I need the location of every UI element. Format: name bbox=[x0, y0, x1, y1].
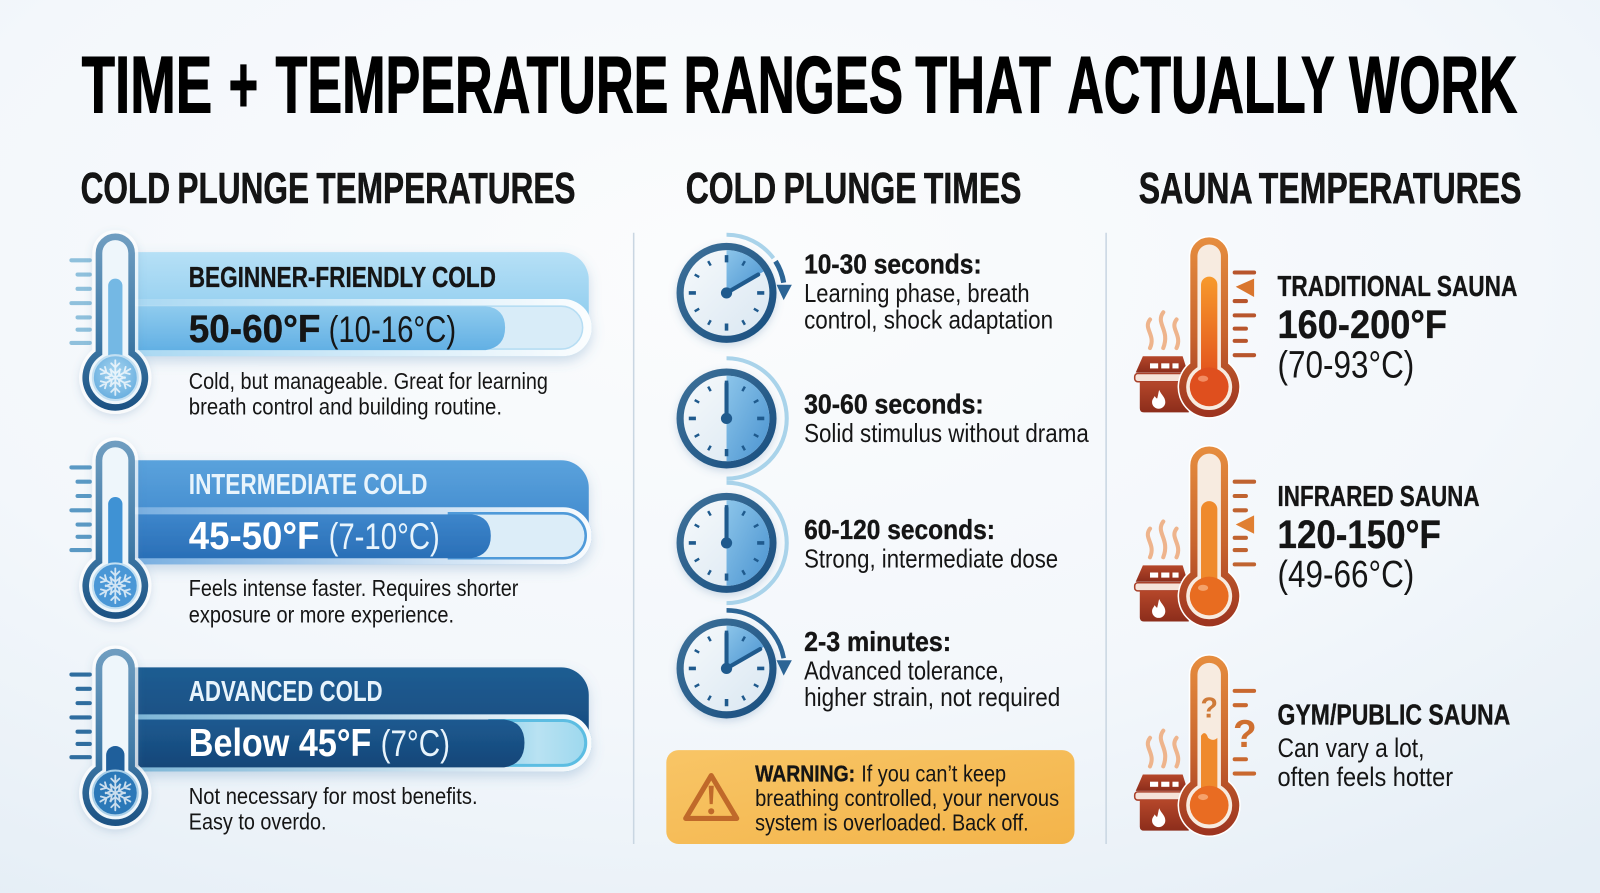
time text: Advanced tolerance, bbox=[804, 658, 1004, 686]
title: TIME bbox=[82, 40, 212, 130]
panel: advanced cold bbox=[71, 652, 592, 835]
time text bbox=[804, 626, 1060, 712]
range: Below 45°F bbox=[189, 722, 371, 765]
time text: control, shock adaptation bbox=[804, 307, 1053, 335]
icon: sauna thermometer and heater: ? bbox=[1233, 713, 1257, 756]
title: ACTUALLY bbox=[1067, 40, 1335, 130]
time text: Strong, intermediate dose bbox=[804, 545, 1058, 573]
warning text: WARNING: bbox=[755, 761, 855, 787]
time text: 60-120 seconds: bbox=[804, 514, 995, 545]
panel: traditional sauna bbox=[1135, 241, 1517, 414]
time text bbox=[804, 249, 1053, 335]
description: Cold, but manageable. Great for learning bbox=[189, 368, 548, 394]
banner: advanced cold bbox=[128, 667, 592, 772]
range: 45-50°F bbox=[189, 515, 319, 558]
range: 50-60°F bbox=[189, 308, 320, 351]
icon: clock 60-120 seconds bbox=[680, 483, 787, 603]
heading: cold plunge times: COLD PLUNGE TIMES bbox=[686, 164, 1021, 213]
title: RANGES bbox=[684, 40, 903, 130]
panel: intermediate cold bbox=[71, 444, 592, 628]
panel: beginner-friendly cold bbox=[71, 237, 592, 419]
panel: time 2-3 minutes bbox=[680, 610, 1060, 715]
sauna text: 160-200°F bbox=[1278, 303, 1447, 347]
time text: 30-60 seconds: bbox=[804, 388, 984, 419]
icon: cold thermometer bbox=[71, 444, 145, 616]
time text: higher strain, not required bbox=[804, 684, 1060, 712]
label: BEGINNER-FRIENDLY COLD bbox=[189, 262, 496, 294]
sauna text: INFRARED SAUNA bbox=[1278, 481, 1480, 513]
range: (7°C) bbox=[381, 723, 450, 764]
description: exposure or more experience. bbox=[189, 602, 454, 628]
icon: sauna thermometer and heater bbox=[1135, 659, 1257, 832]
banner: beginner-friendly cold bbox=[128, 252, 592, 356]
sauna text: (70-93°C) bbox=[1278, 344, 1414, 386]
panel: time 60-120 seconds bbox=[680, 483, 1058, 603]
icon: cold thermometer bbox=[71, 237, 145, 407]
sauna text: (49-66°C) bbox=[1278, 553, 1414, 595]
sauna text: often feels hotter bbox=[1278, 762, 1453, 792]
time text: Solid stimulus without drama bbox=[804, 420, 1089, 448]
icon: sauna thermometer and heater: ? bbox=[1200, 692, 1218, 724]
icon: clock 30-60 seconds bbox=[680, 358, 787, 479]
label: ADVANCED COLD bbox=[189, 676, 383, 708]
range bbox=[189, 308, 456, 351]
time text bbox=[804, 514, 1058, 573]
time text: 2-3 minutes: bbox=[804, 626, 951, 657]
banner: intermediate cold bbox=[128, 460, 592, 564]
time text bbox=[804, 388, 1089, 448]
range: (7-10°C) bbox=[329, 516, 440, 557]
sauna text: 120-150°F bbox=[1278, 513, 1441, 557]
title: THAT bbox=[915, 40, 1051, 130]
icon: clock 10-30 seconds bbox=[680, 235, 792, 339]
warning text: breathing controlled, your nervous bbox=[755, 785, 1059, 811]
icon: sauna thermometer and heater bbox=[1135, 241, 1254, 414]
icon: cold thermometer bbox=[71, 652, 145, 823]
sauna text bbox=[1278, 700, 1510, 792]
warning text bbox=[755, 761, 1059, 836]
warning text: system is overloaded. Back off. bbox=[755, 810, 1029, 836]
description bbox=[189, 783, 478, 835]
time text: Learning phase, breath bbox=[804, 280, 1030, 308]
description bbox=[189, 368, 548, 419]
callout: warning bbox=[666, 750, 1074, 844]
panel: gym/public sauna bbox=[1135, 659, 1510, 832]
title bbox=[82, 40, 1517, 130]
title: WORK bbox=[1349, 40, 1517, 130]
description: Not necessary for most benefits. bbox=[189, 783, 478, 809]
title: TEMPERATURE bbox=[276, 40, 668, 130]
panel: infrared sauna bbox=[1135, 450, 1480, 623]
description: Easy to overdo. bbox=[189, 809, 327, 835]
sauna text: Can vary a lot, bbox=[1278, 733, 1424, 763]
sauna text: TRADITIONAL SAUNA bbox=[1278, 271, 1517, 303]
panel: time 10-30 seconds bbox=[680, 235, 1053, 339]
label: INTERMEDIATE COLD bbox=[189, 469, 428, 501]
panel: time 30-60 seconds bbox=[680, 358, 1089, 479]
icon: warning triangle bbox=[686, 776, 737, 818]
description: breath control and building routine. bbox=[189, 393, 502, 419]
range: (10-16°C) bbox=[329, 309, 456, 350]
heading: cold plunge temperatures: COLD PLUNGE TEMPERATURES bbox=[81, 164, 576, 213]
description bbox=[189, 575, 519, 628]
icon: clock 2-3 minutes bbox=[680, 610, 792, 715]
sauna text bbox=[1278, 481, 1480, 595]
range bbox=[189, 515, 440, 558]
sauna text bbox=[1278, 271, 1517, 386]
sauna text: GYM/PUBLIC SAUNA bbox=[1278, 700, 1510, 732]
time text: 10-30 seconds: bbox=[804, 249, 982, 280]
title: + bbox=[229, 40, 258, 130]
description: Feels intense faster. Requires shorter bbox=[189, 575, 519, 601]
icon: sauna thermometer and heater bbox=[1135, 450, 1254, 623]
warning text: If you can’t keep bbox=[861, 761, 1006, 787]
